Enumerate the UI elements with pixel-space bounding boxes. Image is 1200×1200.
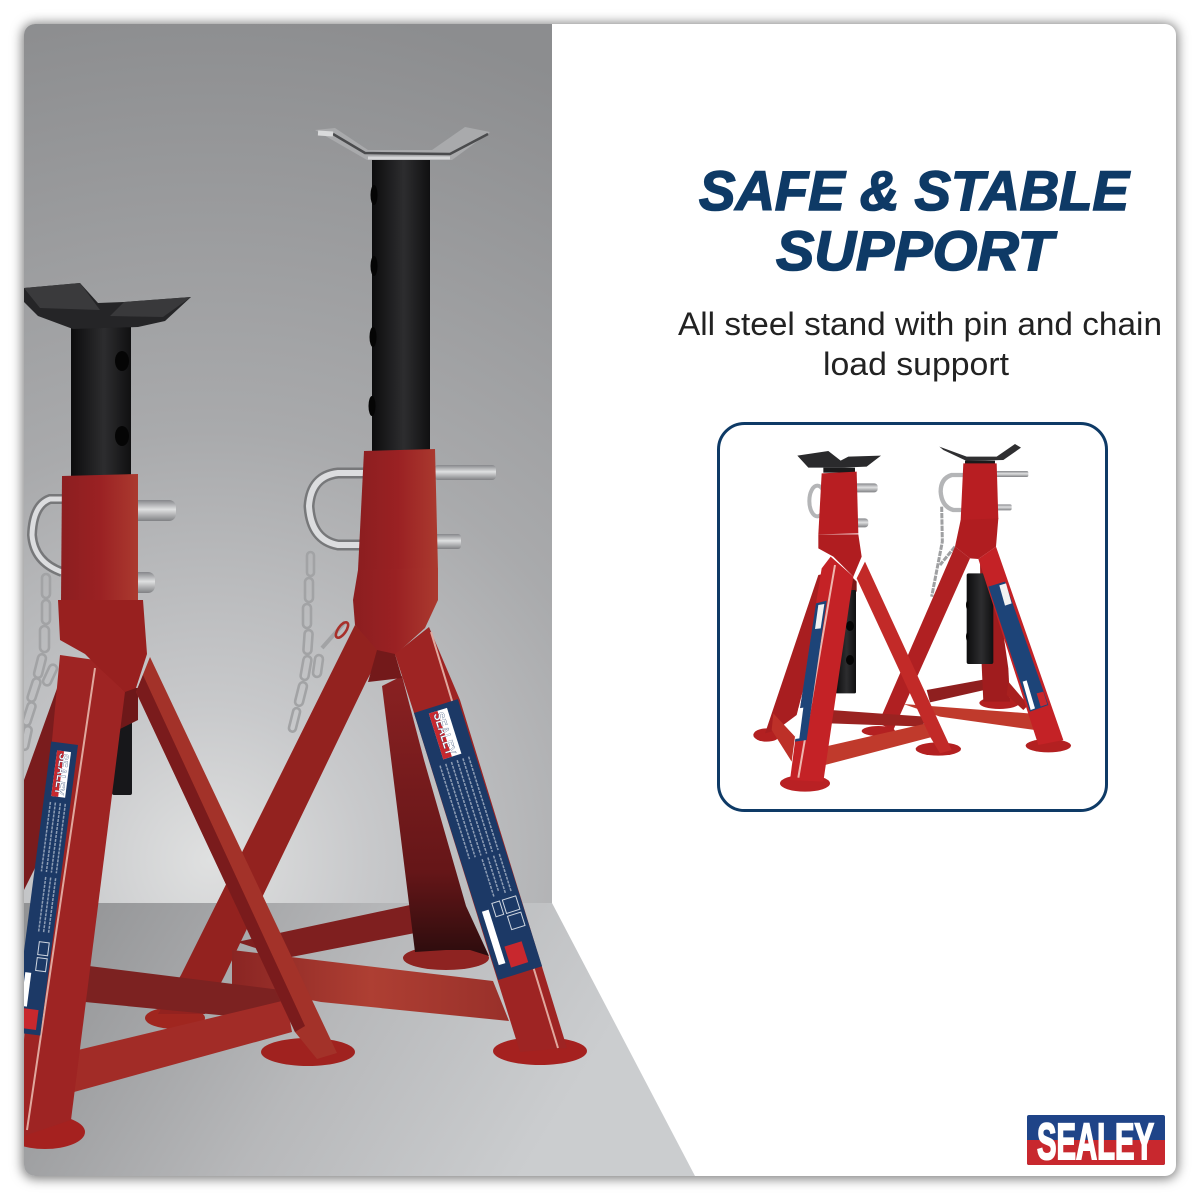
label white strip [795, 708, 803, 739]
lower pin [118, 569, 155, 595]
middle foot [261, 1038, 355, 1066]
telescopic post [71, 325, 131, 480]
rear leg [382, 676, 489, 956]
pins [996, 471, 1028, 510]
lowered post [835, 590, 856, 693]
leg highlight [798, 565, 835, 778]
diagonal leg [857, 562, 952, 753]
label red box [1037, 692, 1047, 707]
collar [818, 472, 858, 534]
front leg [978, 547, 1063, 745]
saddle [315, 127, 490, 160]
inset: product on white [753, 444, 1071, 792]
feet [862, 697, 1071, 752]
hub underside [835, 568, 857, 592]
rear leg [765, 572, 833, 733]
description line 2: load support [823, 346, 1009, 382]
hub [58, 600, 147, 692]
label [988, 582, 1048, 712]
floor [24, 903, 695, 1176]
lower pin [437, 534, 461, 549]
left leg [878, 547, 970, 730]
rear brace [240, 905, 413, 957]
heading line 1: SAFE & STABLE [699, 159, 1131, 222]
label logo [815, 604, 824, 629]
saddle [24, 283, 191, 329]
side brace [772, 713, 795, 762]
axle stand: left, front [5, 283, 355, 1149]
upper brace [830, 710, 925, 727]
rear leg [980, 562, 1010, 702]
warning label [24, 742, 78, 1036]
hub underside [120, 688, 138, 729]
inset left stand [753, 451, 961, 792]
top pin [434, 465, 496, 480]
front brace [903, 704, 1035, 730]
post top [965, 461, 995, 465]
description text [678, 306, 1162, 382]
post holes [966, 601, 969, 641]
front brace [232, 950, 509, 1021]
leg highlight [27, 668, 95, 1130]
warning label [414, 699, 542, 980]
saddle [797, 451, 881, 468]
collar [358, 449, 438, 570]
U-ring pin [309, 473, 364, 545]
warning label: SEALEY [51, 752, 72, 796]
D-ring [809, 486, 825, 516]
lower brace [825, 723, 933, 765]
axle stand: right, raised [145, 127, 587, 1065]
inset frame [718, 424, 1106, 810]
collar [961, 463, 998, 520]
hub [955, 518, 998, 559]
saddle [939, 444, 1021, 461]
front leg [24, 655, 125, 1136]
wall backdrop [24, 24, 552, 904]
top pin [118, 497, 176, 523]
front leg [395, 627, 567, 1052]
post top [823, 468, 855, 473]
D-ring [32, 499, 62, 572]
lowered post end [112, 720, 132, 795]
logo blue band [1027, 1115, 1165, 1165]
post holes [115, 351, 129, 446]
heading line 2: SUPPORT [776, 219, 1058, 282]
lower brace [74, 1000, 292, 1092]
rear-left leg [24, 688, 57, 890]
front foot [780, 775, 830, 792]
label white strip [1023, 680, 1035, 710]
lowered post [967, 573, 993, 664]
panel: product photo [5, 24, 695, 1176]
rear foot [403, 950, 489, 970]
chain [24, 573, 58, 751]
chain [932, 507, 955, 597]
logo red band [1027, 1140, 1165, 1165]
logo: Sealey [1027, 1113, 1165, 1170]
warning label: SEALEY [429, 710, 459, 757]
rear brace [927, 678, 992, 702]
hub [353, 568, 438, 655]
underside of hub [368, 650, 402, 682]
upper brace [85, 966, 285, 1018]
front leg [790, 557, 853, 782]
front foot [493, 1037, 587, 1065]
collar [61, 474, 138, 600]
label logo [999, 583, 1012, 606]
leg highlight [431, 632, 558, 1048]
rear-left foot [145, 1009, 205, 1028]
inset right stand [862, 444, 1071, 752]
heading [699, 159, 1131, 282]
hub [818, 534, 862, 577]
diagonal leg [136, 657, 337, 1059]
chain and ring tab [288, 552, 350, 732]
telescopic post [372, 160, 430, 452]
rear gusset [1007, 682, 1028, 710]
pins [848, 483, 878, 527]
feet [753, 728, 961, 756]
front-left foot [24, 1119, 85, 1149]
post holes [846, 621, 854, 665]
post holes [368, 185, 378, 416]
left leg [158, 625, 382, 1014]
label [795, 601, 827, 742]
U-ring [941, 475, 965, 510]
description line 1: All steel stand with pin and chain [678, 306, 1162, 342]
